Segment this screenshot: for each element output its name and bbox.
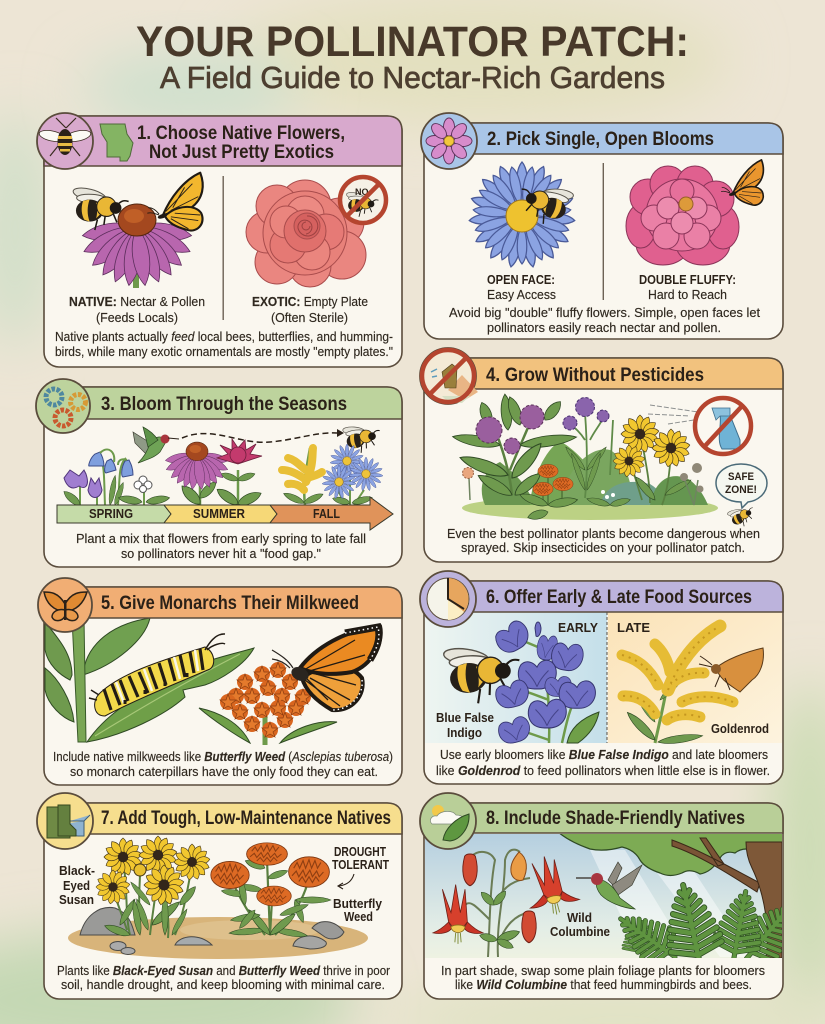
header band 1 (44, 116, 402, 166)
panel 5: monarchs and milkweed (38, 578, 402, 785)
milkweed plant (452, 394, 577, 500)
body text 6: Use early bloomers like Blue False Indigo and late bloomers (440, 747, 768, 762)
safe zone bubble: ZONE! (725, 484, 757, 496)
body text 3: so pollinators never hit a "food gap." (121, 546, 321, 561)
native caption: (Feeds Locals) (96, 310, 178, 325)
wild columbine label: Wild (567, 910, 592, 925)
hummingbird (133, 427, 179, 463)
header band 7 (44, 803, 402, 834)
butterfly weed plants (211, 843, 331, 939)
plant labels 7: Susan (59, 892, 94, 907)
open face caption (487, 272, 556, 302)
double fluffy caption: DOUBLE FLUFFY: (639, 272, 736, 287)
plant labels 7: Butterfly (333, 896, 383, 911)
panel 4: without pesticides (420, 348, 783, 562)
icon: pink flower (421, 113, 477, 169)
garden illustration (452, 394, 718, 521)
season labels (89, 506, 340, 521)
skipper butterfly (699, 648, 763, 692)
native coneflower illustration (72, 173, 203, 288)
panel 8: shade-friendly natives (420, 793, 806, 999)
fall flowers (282, 444, 383, 506)
heading 8: 8. Include Shade-Friendly Natives (486, 808, 745, 829)
tree canopy (558, 832, 785, 876)
panel 3: bloom through seasons (36, 379, 402, 567)
icon: sun cloud leaf (420, 793, 476, 849)
season labels: FALL (313, 506, 340, 521)
heading 1 (137, 123, 345, 163)
plant labels 6: Indigo (447, 725, 482, 740)
late background (608, 612, 782, 743)
double fluffy caption: Hard to Reach (648, 287, 727, 302)
dashed divider (606, 612, 608, 743)
body text 8 (441, 963, 765, 992)
body text 6 (436, 747, 770, 778)
bee 4 (726, 501, 758, 531)
columbine plant (433, 850, 581, 957)
monarch (272, 626, 381, 710)
plant labels 7 (59, 863, 383, 924)
double peony with butterfly (626, 166, 739, 265)
no-bee sign (340, 177, 386, 223)
exotic caption (252, 294, 368, 325)
body text 2: pollinators easily reach nectar and pollen. (487, 320, 721, 335)
soil and rocks (68, 907, 368, 959)
divider (222, 176, 224, 320)
body text 5: so monarch caterpillars have the only food they can eat. (70, 764, 378, 779)
hummingbird 8 (576, 862, 642, 909)
body text 7: Plants like Black-Eyed Susan and Butterfly Weed thrive in poor (57, 963, 391, 978)
butterfly 2 (721, 160, 763, 205)
body text 4: Even the best pollinator plants become dangerous when (447, 526, 760, 541)
milkweed plant and leaves (45, 618, 254, 742)
body text 3: Plant a mix that flowers from early spring to late fall (76, 531, 366, 546)
season labels: SPRING (89, 506, 133, 521)
body text 3 (76, 531, 366, 561)
open face caption: OPEN FACE: (487, 272, 555, 287)
header band 3 (44, 387, 402, 419)
heading 4: 4. Grow Without Pesticides (486, 365, 704, 386)
panel 1: choose native flowers (37, 113, 402, 367)
icon: bee (37, 113, 93, 169)
shaded sky scene (425, 834, 782, 958)
header band 6 (424, 581, 783, 612)
plant labels 6: Goldenrod (711, 721, 769, 736)
wild columbine label (550, 910, 610, 939)
icon: clock (420, 571, 476, 627)
native caption: NATIVE: Nectar & Pollen (69, 294, 205, 309)
drought tolerant note (332, 844, 389, 889)
no-spray sign (694, 397, 752, 455)
exotic rose illustration (246, 180, 366, 287)
caterpillar (89, 634, 225, 716)
body text 5 (53, 749, 393, 779)
wild columbine label: Columbine (550, 924, 610, 939)
safe zone bubble (716, 464, 767, 508)
ferns (618, 882, 782, 958)
exotic caption: EXOTIC: Empty Plate (252, 294, 368, 309)
body text 8: like Wild Columbine that feed hummingbirds and bees. (455, 977, 752, 992)
early / late labels: LATE (617, 620, 650, 635)
spray drift lines (648, 405, 698, 424)
icon: no spraying (420, 348, 478, 404)
plant labels 7: Eyed (63, 878, 90, 893)
dashed arrow (182, 429, 344, 442)
body text 6: like Goldenrod to feed pollinators when little else is in flower. (436, 763, 770, 778)
icon: boots and watering can (37, 793, 93, 849)
early / late labels: EARLY (558, 620, 598, 635)
body text 7 (57, 963, 391, 992)
open face caption: Easy Access (487, 287, 556, 302)
butterfly weed flower (199, 662, 337, 745)
green shrub masses (482, 441, 708, 505)
body text 4 (447, 526, 760, 555)
title: YOUR POLLINATOR PATCH: (136, 18, 689, 66)
goldenrod (622, 626, 733, 746)
title (136, 18, 689, 95)
body text 4: sprayed. Skip insecticides on your pollinator patch. (461, 540, 745, 555)
bumblebee (441, 638, 523, 707)
header band 8 (424, 803, 783, 833)
black-eyed susan plants (96, 836, 210, 938)
heading 7: 7. Add Tough, Low-Maintenance Natives (101, 808, 391, 829)
black-eyed susans (613, 415, 693, 505)
summer flowers (164, 439, 263, 508)
body text 1: Native plants actually feed local bees, butterflies, and humming- (55, 329, 393, 344)
body text 1: birds, while many exotic ornamentals are mostly "empty plates." (55, 344, 393, 359)
heading 5: 5. Give Monarchs Their Milkweed (101, 593, 359, 614)
body text 2 (449, 305, 760, 335)
drought tolerant note: TOLERANT (332, 857, 389, 872)
season arrow (57, 497, 393, 530)
season labels: SUMMER (193, 506, 246, 521)
header band 5 (44, 587, 402, 618)
exotic caption: (Often Sterile) (271, 310, 348, 325)
title: A Field Guide to Nectar-Rich Gardens (160, 60, 665, 95)
body text 7: soil, handle drought, and keep blooming with minimal care. (61, 977, 385, 992)
heading 1: Not Just Pretty Exotics (149, 142, 334, 163)
heading 2: 2. Pick Single, Open Blooms (487, 129, 714, 150)
blue false indigo (492, 618, 599, 746)
divider (603, 163, 604, 300)
panel 6: early and late food (420, 571, 783, 784)
body text 5: Include native milkweeds like Butterfly Weed (Asclepias tuberosa) (53, 749, 393, 764)
icon: gears (36, 379, 90, 433)
icon: state map (100, 124, 133, 161)
spring flowers (62, 450, 170, 508)
heading 1: 1. Choose Native Flowers, (137, 123, 345, 144)
orange flowers (518, 464, 578, 521)
early / late labels (558, 620, 650, 635)
tall purple flowers (563, 398, 613, 498)
open aster with bee (464, 157, 580, 273)
icon: butterfly (38, 578, 92, 632)
body text 2: Avoid big "double" fluffy flowers. Simple, open faces let (449, 305, 760, 320)
drought tolerant note: DROUGHT (334, 844, 386, 859)
header band 2 (424, 123, 783, 154)
small side flowers (462, 463, 704, 508)
header band 4 (424, 358, 783, 389)
plant labels 6: Blue False (436, 710, 494, 725)
panel 2: single open blooms (421, 113, 783, 339)
early background (425, 612, 607, 743)
double fluffy caption (639, 272, 736, 302)
heading 6: 6. Offer Early & Late Food Sources (486, 587, 752, 608)
tree branches and trunk (672, 838, 760, 892)
plant labels 7: Weed (344, 909, 373, 924)
plant labels 6 (436, 710, 769, 740)
native caption (69, 294, 205, 325)
safe zone bubble: SAFE (728, 471, 754, 483)
heading 3: 3. Bloom Through the Seasons (101, 394, 347, 415)
body text 8: In part shade, swap some plain foliage plants for bloomers (441, 963, 765, 978)
panel 7: tough natives (37, 793, 402, 999)
bee 3 (341, 420, 383, 455)
body text 1 (55, 329, 393, 359)
plant labels 7: Black- (59, 863, 95, 878)
no-bee sign: NO (355, 187, 368, 197)
